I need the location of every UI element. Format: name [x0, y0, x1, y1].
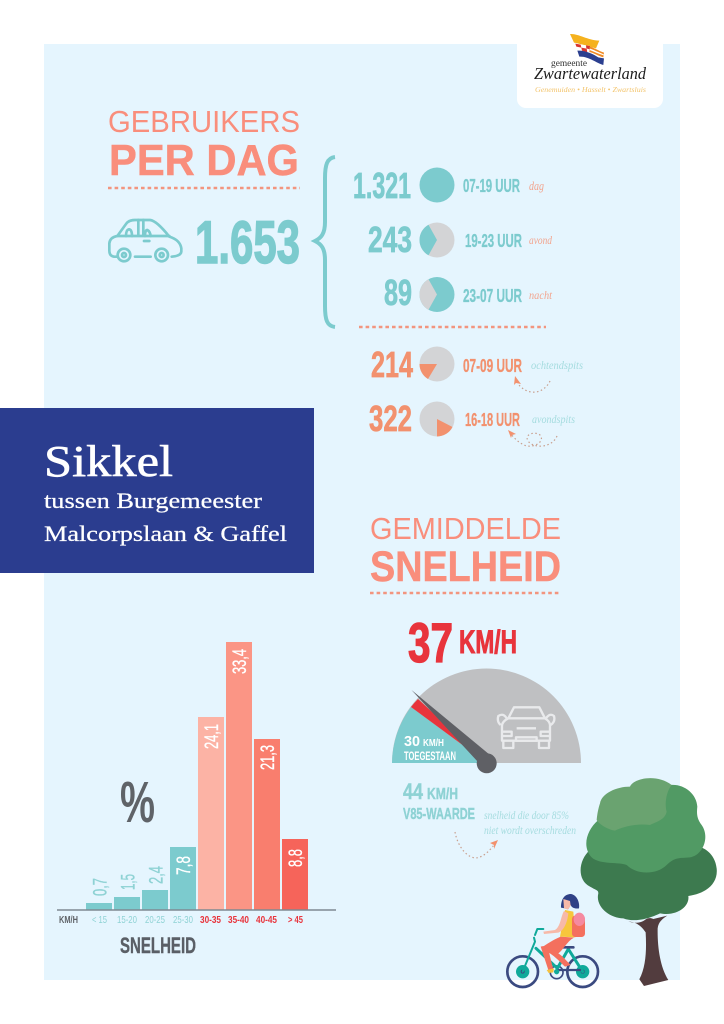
logo text: gemeente: gemeente	[551, 59, 587, 69]
gauge label: 30 km/h toegestaan: KM/H	[423, 738, 444, 749]
row: nacht: 89	[384, 272, 412, 313]
bar values: 2,4	[146, 866, 168, 884]
bicycle	[507, 929, 598, 987]
row: dag: 1.321	[353, 165, 411, 206]
percent sign: %	[120, 770, 155, 835]
bar values: 0,7	[90, 878, 112, 896]
row: avond	[368, 219, 553, 260]
v85 value: KM/H	[427, 786, 458, 803]
row: dag	[353, 165, 544, 206]
gauge label: 30 km/h toegestaan: TOEGESTAAN	[404, 751, 456, 763]
icon: cyclist	[507, 894, 598, 987]
row: dag: 07-19 UUR	[463, 176, 520, 196]
bar values: 1,5	[118, 874, 140, 890]
axis labels: > 45	[288, 914, 303, 926]
arrow: avondspits	[508, 430, 557, 446]
total: 1.653: 1.653	[195, 209, 300, 276]
logo text: Zwartewaterland: Zwartewaterland	[534, 64, 646, 83]
row: avondspits: 322	[369, 398, 412, 439]
rider	[542, 937, 574, 967]
axis labels: KM/H	[59, 914, 78, 926]
bars	[86, 642, 308, 910]
row: ochtendspits	[371, 344, 583, 385]
bar values: 33,4	[230, 649, 251, 674]
icon: car	[109, 220, 181, 261]
row: avondspits: 16-18 UUR	[465, 410, 520, 430]
logo card	[517, 30, 663, 108]
speed: 37 km/h: KM/H	[459, 624, 517, 660]
heading: gebruikers per dag	[108, 104, 300, 188]
panel: title	[0, 408, 314, 573]
row: dag: dag	[529, 178, 544, 193]
axis labels: 25-30	[173, 914, 193, 926]
row: nacht	[384, 272, 553, 313]
heading: gebruikers per dag: PER DAG	[109, 136, 299, 185]
row: ochtendspits: 07-09 UUR	[463, 356, 522, 376]
axis title: SNELHEID	[120, 933, 196, 958]
bar values: 24,1	[202, 724, 223, 749]
bar values: 8,8	[286, 849, 307, 867]
v85 value: V85-WAARDE	[403, 806, 475, 823]
panel: title: Sikkel	[44, 437, 173, 486]
icon: car front	[498, 707, 554, 748]
heading: gemiddelde snelheid: GEMIDDELDE	[370, 511, 561, 546]
row: ochtendspits: 214	[371, 344, 413, 385]
v85 value	[403, 779, 475, 823]
gauge	[392, 668, 581, 773]
bar chart	[57, 642, 336, 958]
v85 value: 44	[403, 779, 424, 804]
row: avondspits: avondspits	[532, 412, 575, 426]
v85 note	[484, 810, 576, 837]
panel: title: Malcorpslaan & Gaffel	[44, 521, 287, 546]
axis labels	[59, 914, 303, 926]
axis labels: 40-45	[256, 914, 277, 926]
row: avondspits	[369, 398, 575, 439]
icon: tree	[581, 778, 717, 986]
gauge label: 30 km/h toegestaan: 30	[404, 733, 420, 750]
row: nacht: 23-07 UUR	[463, 286, 522, 306]
row: avond: 19-23 UUR	[465, 231, 522, 251]
axis labels: < 15	[92, 914, 107, 926]
arrow: v85	[455, 832, 498, 858]
speed: 37 km/h	[408, 611, 517, 674]
axis labels: 20-25	[145, 914, 165, 926]
gauge label: 30 km/h toegestaan	[404, 733, 456, 763]
v85 note: niet wordt overschreden	[484, 825, 576, 837]
bar values	[90, 649, 307, 896]
heading: gemiddelde snelheid	[370, 511, 561, 593]
logo text: places: Genemuiden • Hasselt • Zwartsluis	[535, 85, 646, 94]
row: ochtendspits: ochtendspits	[531, 358, 583, 372]
axis labels: 35-40	[228, 914, 249, 926]
heading: gemiddelde snelheid: SNELHEID	[370, 543, 561, 591]
speed: 37 km/h: 37	[408, 611, 453, 674]
v85 note: snelheid die door 85%	[484, 810, 569, 822]
arrow: ochtendspits	[514, 376, 550, 392]
bar values: 21,3	[258, 745, 279, 770]
panel: title: tussen Burgemeester	[44, 488, 263, 513]
row: avond: avond	[529, 233, 553, 247]
row: avond: 243	[368, 219, 412, 260]
axis labels: 15-20	[117, 914, 137, 926]
bar values: 7,8	[174, 856, 195, 875]
heading: gebruikers per dag: GEBRUIKERS	[108, 104, 300, 139]
brace	[315, 157, 335, 327]
axis labels: 30-35	[200, 914, 221, 926]
row: nacht: nacht	[529, 288, 553, 302]
icon: flag	[570, 34, 604, 65]
